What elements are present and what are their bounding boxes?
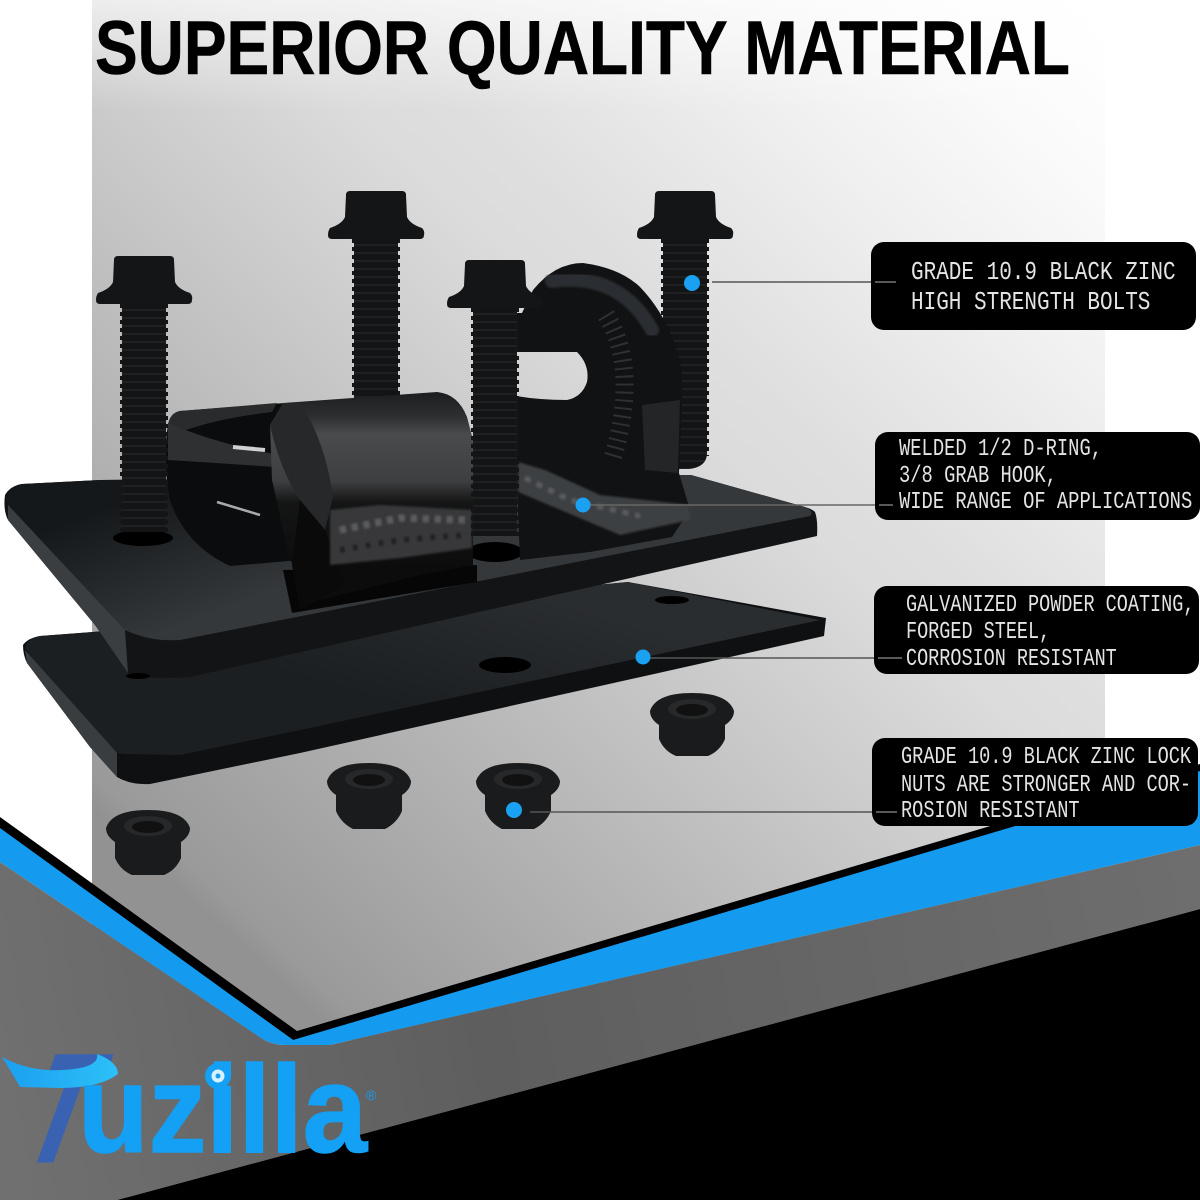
- marker dot: nuts: [506, 802, 522, 818]
- callout: nuts: [872, 738, 1198, 826]
- callout: coating: GALVANIZED POWDER COATING,: [906, 592, 1194, 619]
- D-ring mount: [270, 392, 473, 610]
- callout: bolts: [871, 242, 1196, 330]
- callout: bolts: HIGH STRENGTH BOLTS: [911, 288, 1150, 318]
- lower plate: [23, 582, 826, 784]
- callout: D-ring: 3/8 GRAB HOOK,: [899, 462, 1057, 490]
- logo: Tuzilla: [2, 1025, 377, 1192]
- marker dot: coating: [636, 650, 650, 664]
- black corner: [117, 909, 1200, 1200]
- gray band: [0, 845, 1200, 1200]
- upper plate: [4, 475, 817, 679]
- callout: nuts: NUTS ARE STRONGER AND COR-: [901, 772, 1191, 799]
- nut: centre left: [327, 763, 411, 829]
- marker dot: D-ring: [576, 498, 590, 512]
- callout: coating: [874, 586, 1199, 674]
- logo: Tuzilla: ®: [366, 1087, 377, 1103]
- weld bead: hook: [518, 462, 690, 535]
- callout: D-ring: WIDE RANGE OF APPLICATIONS: [899, 488, 1192, 516]
- nut: right: [650, 693, 734, 756]
- logo: Tuzilla: T: [6, 1025, 124, 1192]
- callout: coating: FORGED STEEL,: [906, 619, 1050, 646]
- leader line: nuts: [530, 811, 874, 813]
- callout: coating: CORROSION RESISTANT: [906, 646, 1117, 673]
- leader line: bolts: [712, 281, 872, 283]
- nut: centre right: [476, 763, 560, 829]
- bolt: rear centre: [328, 191, 424, 409]
- callout: D-ring: WELDED 1/2 D-RING,: [899, 435, 1102, 463]
- bolt: rear right: [637, 191, 733, 469]
- bolt: front left: [96, 256, 192, 532]
- bolt: front centre: [447, 260, 543, 536]
- callout: nuts: GRADE 10.9 BLACK ZINC LOCK: [901, 744, 1191, 771]
- leader line: coating: [650, 657, 876, 659]
- weld bead: D-ring: [330, 505, 472, 565]
- nut: far left: [106, 810, 190, 875]
- black accent line: [0, 764, 1200, 1042]
- leader line: D-ring: [590, 504, 876, 506]
- marker dot: bolts: [684, 275, 700, 291]
- logo: Tuzilla: uzilla: [78, 1041, 368, 1179]
- callout: bolts: GRADE 10.9 BLACK ZINC: [911, 258, 1176, 288]
- grab hook: [516, 263, 690, 560]
- blue band: [0, 771, 1200, 1045]
- callout: nuts: ROSION RESISTANT: [901, 798, 1080, 825]
- D-ring: [165, 403, 300, 566]
- callout: D-ring: [875, 432, 1200, 520]
- background panel: [92, 0, 1105, 1040]
